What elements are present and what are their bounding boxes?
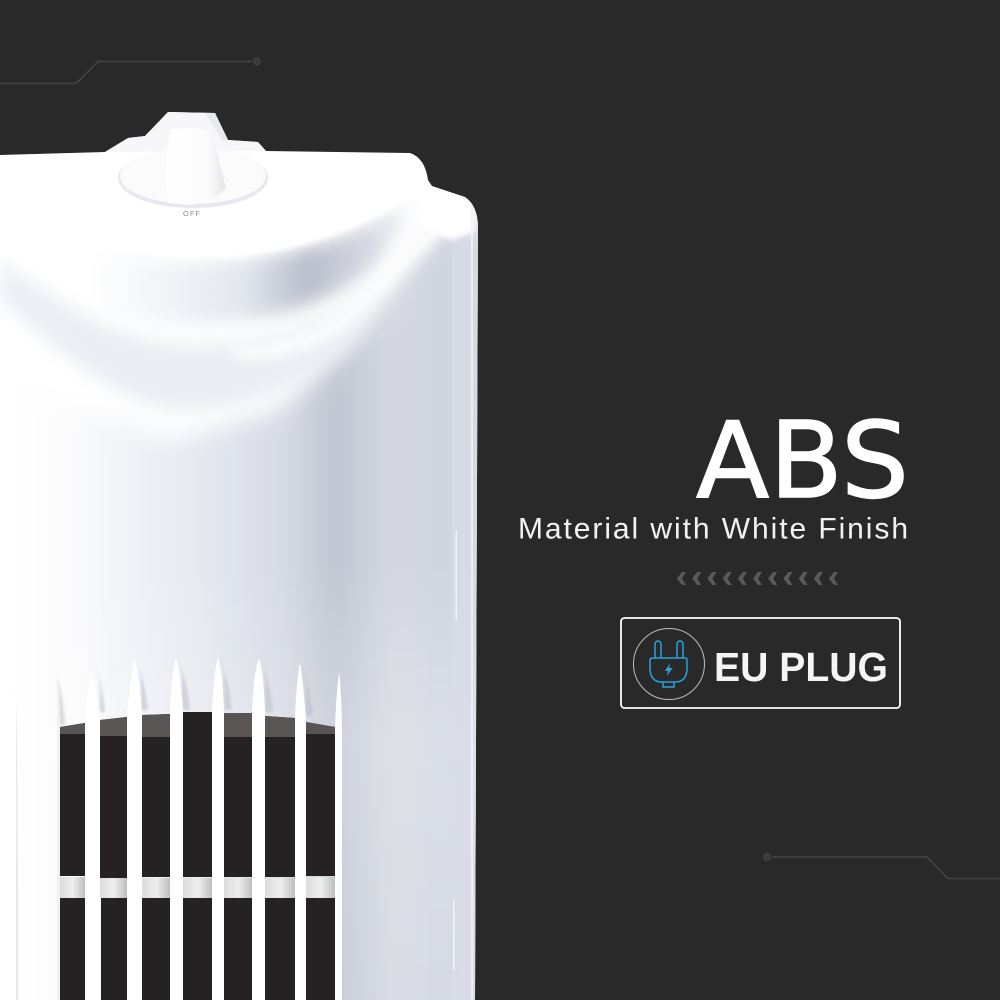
right strip: [452, 215, 472, 1000]
rotary dial: [105, 112, 268, 208]
badge label: EU PLUG: [714, 644, 888, 690]
dial label: OFF: [183, 209, 201, 218]
top plate: [254, 215, 375, 254]
vent fins: [15, 657, 342, 1000]
fin shadows: [57, 657, 313, 725]
badge: EU plug: [621, 618, 900, 708]
mid diagonal shade: [0, 268, 347, 413]
product: white tower fan: [0, 100, 520, 1000]
circuit line: bottom right: [764, 854, 1000, 878]
vent top highlights: [60, 713, 335, 737]
circuit line: top left: [0, 58, 260, 84]
side shading: [96, 211, 478, 1000]
icon: plug in circle: [634, 628, 704, 700]
chevron divider: [677, 572, 838, 585]
fan body: [0, 100, 520, 1000]
heading: ABS: ABS: [696, 400, 909, 522]
vent crossbar: [60, 877, 336, 898]
white highlight ridge: [238, 232, 442, 360]
lower lightening: [292, 676, 476, 936]
subheading: Material with White Finish: [518, 512, 908, 546]
vent openings: [60, 712, 335, 1000]
badge frame: [621, 618, 900, 708]
top plate shadow band: [138, 209, 404, 326]
